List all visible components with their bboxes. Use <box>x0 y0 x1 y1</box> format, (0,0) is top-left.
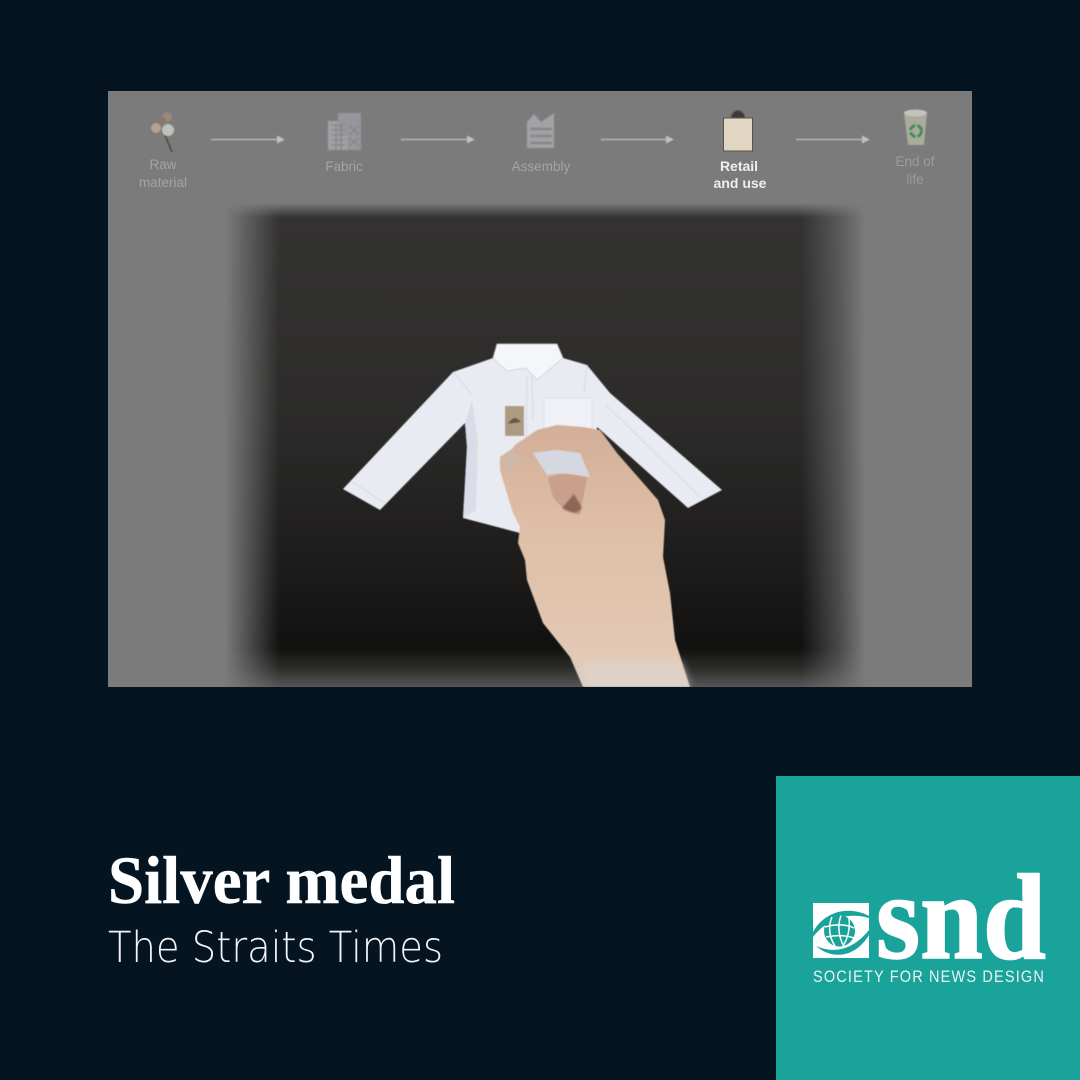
process strip <box>139 110 935 191</box>
label: end of life: End of <box>895 154 935 169</box>
icon: fabric <box>328 113 361 150</box>
sleeve fold <box>352 365 700 503</box>
label: assembly: Assembly <box>512 159 571 174</box>
icon: shopping bag <box>724 110 752 151</box>
finger shadow <box>562 494 582 512</box>
shirt shading <box>463 400 478 518</box>
shirt body and sleeves <box>343 344 722 533</box>
label: raw material: Raw <box>149 157 177 172</box>
collar <box>493 344 563 380</box>
placket <box>526 376 534 437</box>
icon: recycling cup <box>904 110 927 145</box>
arrow 3 <box>601 136 674 144</box>
hand shape <box>500 425 690 687</box>
curled finger <box>548 474 587 515</box>
icon: cotton plant <box>151 112 174 152</box>
gap between fingers: shirt showing <box>533 450 590 477</box>
icon: factory <box>527 113 554 148</box>
panel: video still <box>108 91 972 687</box>
thumbnail <box>501 452 520 469</box>
pocket <box>544 398 592 399</box>
icon: eye and globe <box>813 903 869 958</box>
arrow 1 <box>211 136 285 144</box>
label: retail and use line 2: and use <box>714 175 767 191</box>
arrow 4 <box>796 136 870 144</box>
wordmark: snd: snd <box>876 850 1046 985</box>
shirt <box>343 344 722 533</box>
label: end of life line 2: life <box>906 172 924 187</box>
heading: silver medal: Silver medal <box>108 842 455 918</box>
photo: dark backdrop <box>225 203 865 687</box>
panel: snd logo block <box>776 776 1080 1080</box>
hand <box>500 425 690 687</box>
label: retail and use: Retail <box>720 158 758 174</box>
price tag <box>505 406 524 436</box>
arrow 2 <box>401 136 475 144</box>
fade at wrist <box>578 662 690 687</box>
label: raw material line 2: material <box>139 175 187 190</box>
subheading: the straits times: The Straits Times <box>108 923 443 973</box>
caption: society for news design: SOCIETY FOR NEWS DESIGN <box>813 968 1045 986</box>
label: fabric: Fabric <box>325 159 363 174</box>
